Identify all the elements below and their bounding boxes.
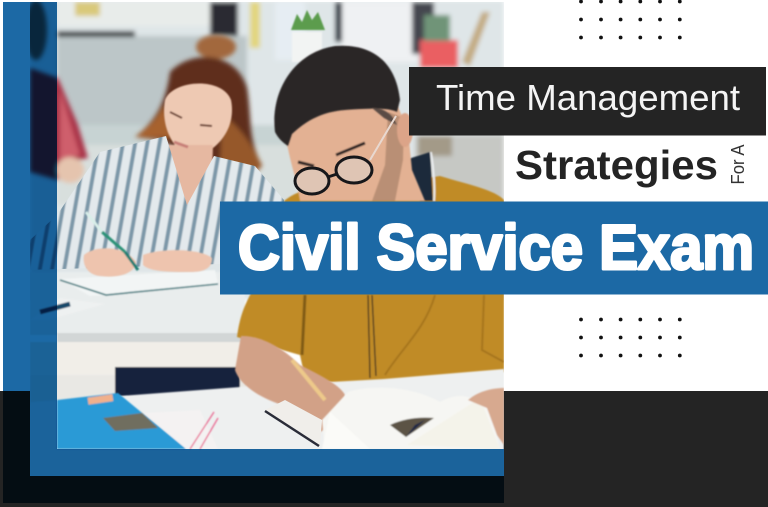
blue folder and loose papers xyxy=(57,393,218,449)
black notebook on lower table xyxy=(265,400,322,446)
photo background: classroom wall and shelves xyxy=(30,0,504,300)
title box: Time Management xyxy=(409,67,766,136)
open book and right hand xyxy=(322,388,504,449)
man: arm and writing hand xyxy=(235,336,345,434)
background student at far left xyxy=(25,0,88,183)
blue left strip xyxy=(3,2,30,391)
title text: Time Management xyxy=(436,77,740,118)
rotated label: For A: For A xyxy=(728,144,748,184)
dot grid: bottom xyxy=(579,318,682,357)
dot grid: top xyxy=(579,0,682,39)
woman: hands and pen xyxy=(84,212,212,277)
dark bottom band xyxy=(0,391,768,507)
woman: striped shirt xyxy=(30,130,290,270)
photo: classroom with two students xyxy=(25,0,504,476)
woman: face and neck xyxy=(164,83,232,207)
man: glasses xyxy=(295,116,396,194)
man: mustard shirt xyxy=(237,152,504,385)
man: hair xyxy=(274,46,400,146)
dark photo shadow block xyxy=(3,391,504,503)
banner: Civil Service Exam xyxy=(220,202,768,294)
man: neck and face xyxy=(284,100,425,201)
woman: hair xyxy=(135,35,262,178)
heading: Strategies: Strategies xyxy=(515,142,718,188)
potted plant xyxy=(291,10,325,62)
blue tint: photo bottom edge xyxy=(57,449,504,476)
blue tint: photo left edge xyxy=(30,2,57,476)
near table and notebook xyxy=(30,270,247,405)
lower table xyxy=(30,369,504,476)
